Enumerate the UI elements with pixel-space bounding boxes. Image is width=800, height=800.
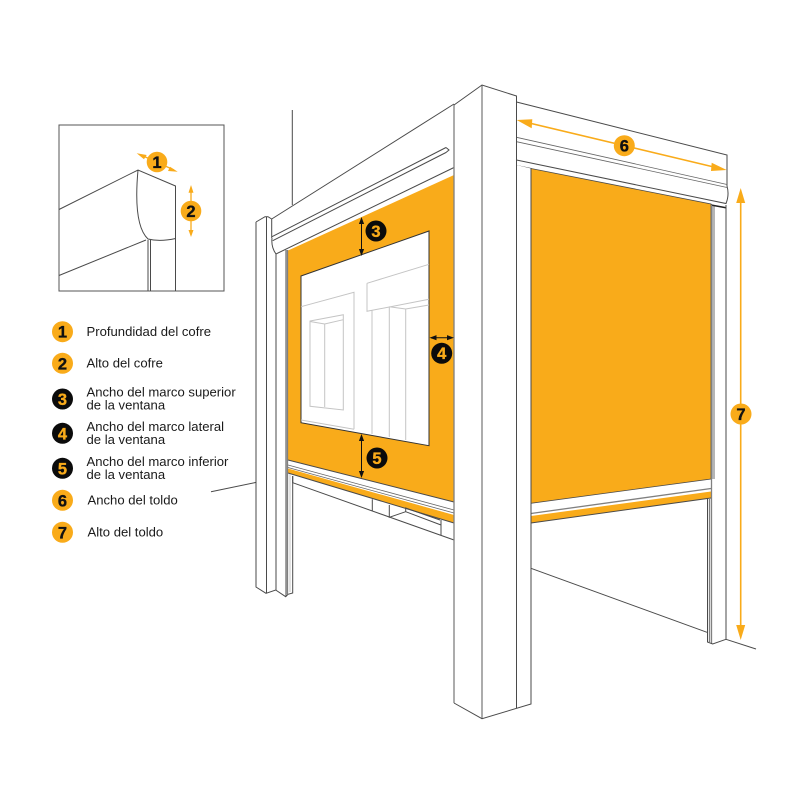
legend item 4: de la ventana xyxy=(86,432,166,447)
badge 7: 7 xyxy=(736,406,746,424)
right post xyxy=(708,205,726,644)
arrow: 5 window bottom frame xyxy=(359,434,364,478)
badge 2 xyxy=(181,201,201,221)
legend item 7: Alto del toldo xyxy=(88,525,163,540)
panel: box detail inset xyxy=(59,125,224,291)
badge 1 xyxy=(147,152,167,172)
legend item 2: Alto del cofre xyxy=(86,356,163,371)
legend item 5: 5 xyxy=(58,460,67,478)
badge 3: 3 xyxy=(371,223,381,241)
right awning orange fabric xyxy=(531,168,711,503)
badge 5 xyxy=(366,448,388,468)
box section drawing xyxy=(59,170,176,291)
badge 5: 5 xyxy=(372,450,382,468)
arrow: 6 awning width xyxy=(517,119,727,171)
legend item 1 xyxy=(52,321,211,342)
right awning box xyxy=(516,102,728,204)
legend item 3 xyxy=(52,384,236,413)
legend item 6 xyxy=(52,490,178,511)
badge 6 xyxy=(614,135,635,156)
legend item 7 xyxy=(52,522,163,543)
legend item 5: Ancho del marco inferior xyxy=(86,454,229,469)
arrow: 1 box depth xyxy=(137,153,178,172)
badge 3 xyxy=(366,220,386,242)
right bottom bar and orange strip xyxy=(531,488,711,523)
legend item 3: 3 xyxy=(58,391,67,409)
arrow: 4 window side frame xyxy=(430,335,454,340)
window opening xyxy=(301,231,429,446)
panel: right awning xyxy=(516,102,728,644)
legend item 4: Ancho del marco lateral xyxy=(86,419,224,434)
badge 4: 4 xyxy=(437,345,447,363)
legend item 5 xyxy=(52,454,229,482)
left post xyxy=(256,217,293,597)
arrow: 3 window top frame xyxy=(359,217,364,256)
legend item 4: 4 xyxy=(58,425,68,443)
legend item 2: 2 xyxy=(58,355,67,373)
legend item 7: 7 xyxy=(58,524,67,542)
legend item 6: 6 xyxy=(58,492,67,510)
badge 6: 6 xyxy=(620,138,629,156)
left bottom bar and orange strip xyxy=(288,460,454,523)
arrow: 7 awning height xyxy=(736,188,745,640)
legend item 1: Profundidad del cofre xyxy=(86,324,211,339)
legend item 4 xyxy=(52,419,224,447)
badge 2: 2 xyxy=(186,203,196,221)
legend item 2 xyxy=(52,353,163,374)
lower structure seen under awning xyxy=(293,476,454,540)
legend xyxy=(52,321,236,543)
legend item 6: Ancho del toldo xyxy=(88,493,178,508)
legend item 5: de la ventana xyxy=(86,467,166,482)
badge 1: 1 xyxy=(152,154,162,172)
central column xyxy=(454,85,531,719)
panel: left awning with window xyxy=(272,104,454,540)
badge 4 xyxy=(431,343,452,364)
legend item 3: Ancho del marco superior xyxy=(86,384,236,400)
legend item 3: de la ventana xyxy=(86,398,166,413)
badge 7 xyxy=(730,404,752,424)
wall and floor background lines xyxy=(211,110,756,649)
left awning orange fabric xyxy=(288,175,454,502)
arrow: 2 box height xyxy=(188,185,194,237)
left awning box xyxy=(272,104,454,254)
legend item 1: 1 xyxy=(58,324,67,342)
